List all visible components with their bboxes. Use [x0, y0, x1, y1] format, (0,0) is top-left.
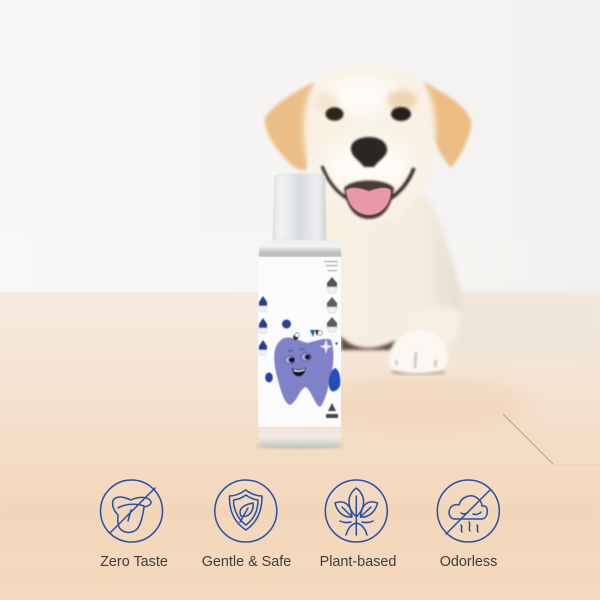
tooth body [274, 338, 333, 407]
tooth sparkle [320, 339, 332, 354]
foreleg [400, 307, 463, 348]
dog [265, 67, 471, 374]
label: Zero Taste: Zero Taste [100, 554, 168, 570]
tooth brows [288, 349, 305, 352]
bottle label [258, 257, 341, 427]
bottle shoulder [259, 241, 341, 258]
icon: shield with leaf [215, 480, 277, 542]
label: Plant-based: Plant-based [320, 554, 396, 570]
wooden floor [0, 292, 600, 600]
brand logo on label [326, 403, 338, 418]
tooth right eye [301, 353, 311, 361]
icon: plant with roots [325, 480, 387, 542]
right ear [424, 82, 471, 168]
nose [351, 137, 387, 167]
icon: crossed-out cloud with vapour [437, 480, 499, 542]
left ear [265, 82, 314, 170]
feature: plant-based [320, 480, 396, 570]
tooth left eye [284, 356, 294, 364]
right eye [391, 107, 411, 121]
left brow tint [314, 93, 338, 111]
small dot right [335, 342, 338, 345]
tooth illustration [265, 320, 340, 407]
mouth [322, 166, 414, 219]
icon: crossed-out tongue [100, 480, 162, 542]
tooth smile [292, 367, 306, 377]
dog body [322, 179, 462, 348]
floor shadow by paw [391, 370, 445, 374]
blue blob right [329, 368, 340, 391]
label: Gentle & Safe: Gentle & Safe [202, 554, 291, 570]
blue dot left [265, 372, 273, 382]
shadow under dog [341, 336, 396, 350]
small characters on tooth [293, 330, 322, 340]
head [303, 67, 436, 224]
bottle [256, 174, 344, 448]
contact shadow [256, 444, 344, 448]
tongue [346, 188, 391, 215]
background wall [0, 0, 600, 236]
right badges [327, 277, 337, 332]
paw toes [396, 352, 436, 368]
feature: gentle and safe [202, 480, 291, 570]
label fine print [324, 261, 338, 271]
left eye [326, 107, 344, 121]
blue dot top [282, 320, 291, 328]
left badges [259, 296, 267, 355]
front paw [389, 330, 448, 374]
forehead highlight [326, 75, 394, 115]
label: Odorless: Odorless [440, 554, 497, 570]
right brow tint [387, 90, 417, 110]
feature: zero taste [100, 480, 168, 570]
baseboard [0, 234, 600, 293]
feature: odorless [437, 480, 499, 570]
muzzle highlight [324, 139, 412, 191]
clear bottle base [259, 427, 341, 447]
bottle cap [273, 174, 326, 240]
